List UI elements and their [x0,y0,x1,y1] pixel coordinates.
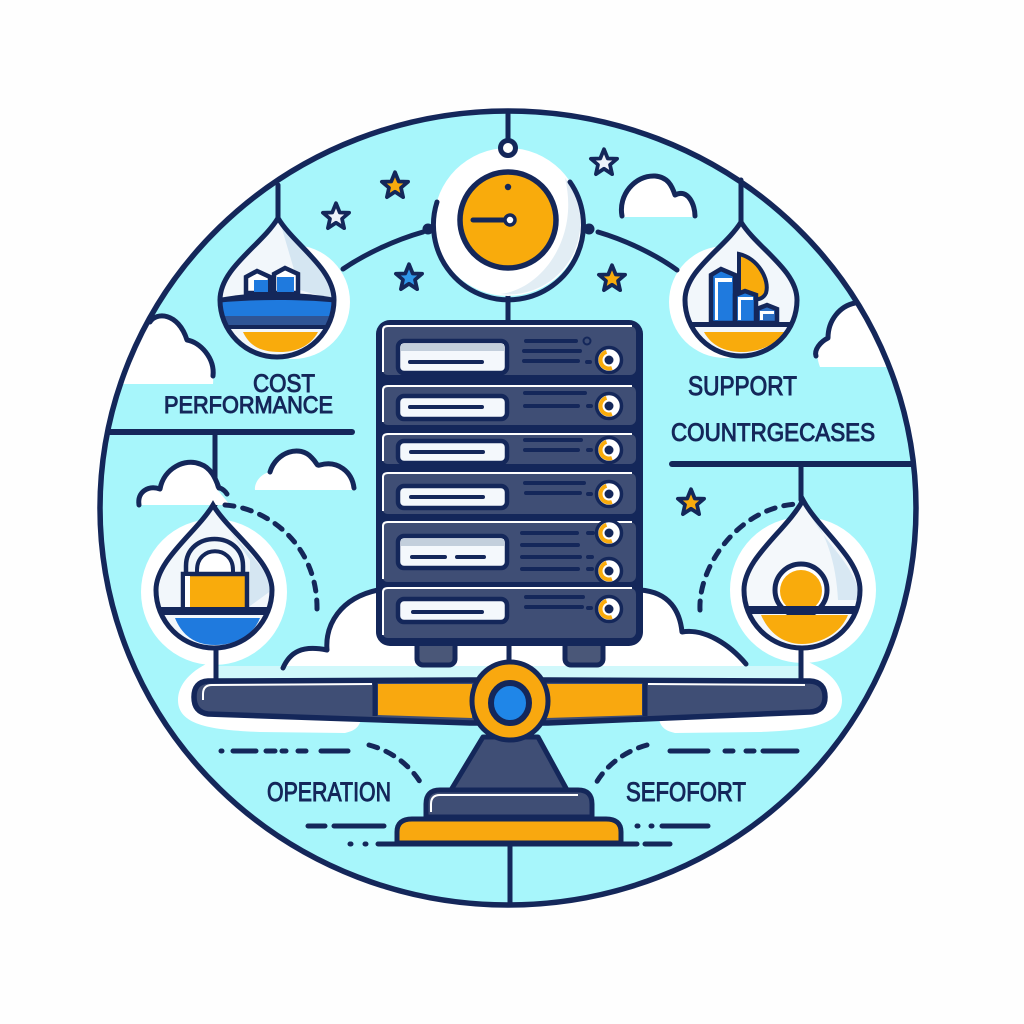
building right window [277,277,294,292]
outline: behind-server cloud left [283,590,378,668]
halo: lower right drop [730,517,876,663]
bar short [757,305,777,323]
drop icon: lock [156,505,272,648]
star white left [323,203,349,228]
dashed arc lower left drop [225,505,317,610]
crescent orange [739,254,767,299]
scale support triangle [451,737,567,790]
cloud: top right [621,176,695,217]
upper base highlight [431,795,578,812]
navy bar [228,325,326,329]
label: sefofort: SEFOFORT [626,777,746,807]
navy bar [744,606,860,614]
scale beam [194,680,825,723]
unit highlights [383,326,632,635]
clock pivot [505,215,515,225]
pivot ring [472,662,548,740]
bar medium [735,291,756,323]
halo: upper right drop [669,246,731,358]
outer circle outline [100,111,916,905]
building left [246,271,270,293]
cloud outlines [150,303,855,668]
coin [775,564,827,616]
cloud: upper right [818,306,886,367]
knob 1 [596,348,622,372]
drive slots [398,341,507,622]
navy bar [692,322,790,327]
light band above beam [218,666,798,678]
ring arc [433,182,583,300]
clock tick [505,184,511,190]
halo: beam left end [178,660,362,733]
drop icon: coin [744,500,860,648]
drop icon: support [685,222,797,356]
outline: upper right cloud [816,303,855,356]
balance scale [194,662,825,843]
navy bar [156,607,272,615]
clock icon with ring [422,148,594,300]
star blue [396,264,422,289]
beam highlights [203,684,805,700]
dashed decorations [221,745,797,844]
label: countrgecases: COUNTRGECASES [671,419,875,447]
background panel: cyan circle [100,111,916,905]
cloud: upper left [123,318,214,384]
orange bowl [761,615,848,644]
label: cost: COST [253,370,315,398]
shackle [186,539,243,574]
clouds and white halos [90,245,930,733]
server feet [417,640,603,665]
shackle inner [197,551,233,574]
water band [222,300,332,316]
halo: upper left drop [286,246,350,359]
drop sheen [282,228,332,298]
cloud: middle right of left column [255,451,354,490]
beam orange right [546,684,642,718]
beam separators [375,682,645,716]
blue bowl [175,618,260,645]
dashed arc lower right drop [700,504,797,610]
label: support: SUPPORT [688,371,797,401]
scale lower base [397,819,621,843]
star orange lower right [678,489,704,514]
cloud: behind server [283,590,746,668]
knob 3 [596,438,622,462]
outline: upper left cloud [150,316,213,376]
drop icon: cost performance [215,218,340,357]
star orange right [599,265,625,290]
sheen [226,526,270,606]
beam orange left [378,684,472,718]
knob 2 [596,394,622,418]
orange bowl [704,332,784,352]
scale upper base [426,790,592,817]
star white top right [591,149,617,174]
star orange top left [382,172,408,197]
clock face [460,172,556,268]
slot bands [401,344,504,546]
pivot center [491,683,529,723]
slot lines and panel bars [410,341,593,612]
white strip of lock [185,576,190,608]
status light small [584,338,590,344]
halo: beam right end [658,660,842,733]
server rack [376,320,643,665]
coin orange [780,570,822,612]
water shade [225,316,329,325]
building left window [254,280,268,292]
building right [274,268,298,293]
sheen [811,517,858,600]
label: operation: OPERATION [267,777,391,807]
knob 4 [596,482,622,506]
ring connector left [422,224,434,234]
knob 6 [596,558,622,584]
cloud: middle left [139,462,230,505]
divider lines [108,114,912,903]
platform lid [222,294,332,302]
small ring at top [500,140,516,156]
ring shadow [500,178,580,294]
knob 5 [596,520,622,546]
ring connector right [584,224,594,234]
outline: behind-server cloud right [640,590,746,664]
knob 7 [596,596,622,622]
server units [382,326,636,638]
server body [376,320,643,646]
clock hand [473,218,505,222]
halo: lower left drop [141,519,287,665]
bar tall [711,269,735,323]
label: performance: PERFORMANCE [164,392,333,419]
lock body [183,574,247,610]
bar highlights [715,278,774,320]
orange bowl [243,332,318,352]
